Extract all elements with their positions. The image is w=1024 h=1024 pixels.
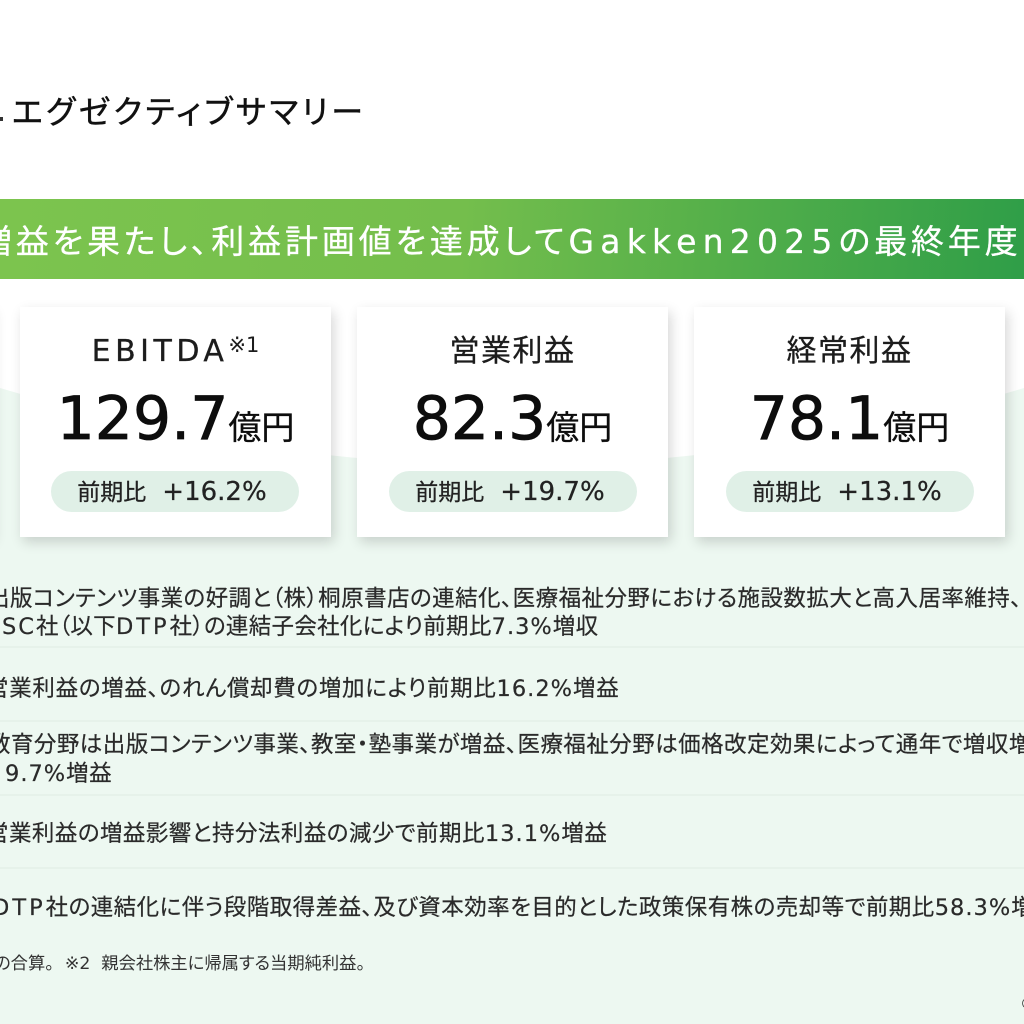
change pill: 前期比 +19.7%	[415, 477, 605, 507]
title: エグゼクティブサマリー	[12, 93, 366, 131]
change pill: 前期比 +16.2%	[77, 477, 267, 507]
card: ordinary profit	[694, 307, 1005, 537]
text row: EBITDA: 営業利益の増益、のれん償却費の増加により前期比16.2%増益	[0, 676, 619, 702]
card: operating profit	[357, 307, 668, 537]
value: 78.1億円	[750, 384, 949, 454]
section number remnant	[0, 117, 3, 121]
card heading: 経常利益	[786, 334, 912, 369]
text row: operating profit	[0, 732, 1024, 787]
card: EBITDA	[20, 307, 331, 537]
line 2: 9.7%増益	[5, 761, 112, 787]
value: 129.7億円	[57, 384, 294, 454]
text row: ordinary profit: 営業利益の増益影響と持分法利益の減少で前期比13.1%増益	[0, 821, 607, 847]
card heading: EBITDA※1	[92, 333, 259, 369]
footnote: の合算。 ※2 親会社株主に帰属する当期純利益。	[0, 954, 365, 974]
card heading: 営業利益	[450, 334, 576, 369]
banner	[0, 199, 1024, 279]
change pill: 前期比 +13.1%	[752, 477, 942, 507]
text row: net sales	[0, 586, 1022, 640]
change pill	[389, 471, 637, 512]
change pill	[726, 471, 974, 512]
value: 82.3億円	[413, 384, 612, 454]
line 2: SC社（以下DTP社）の連結子会社化により前期比7.3%増収	[2, 614, 598, 640]
line 1: 出版コンテンツ事業の好調と（株）桐原書店の連結化、医療福祉分野における施設数拡大と高入居率維持、	[0, 586, 1022, 612]
change pill	[51, 471, 299, 512]
